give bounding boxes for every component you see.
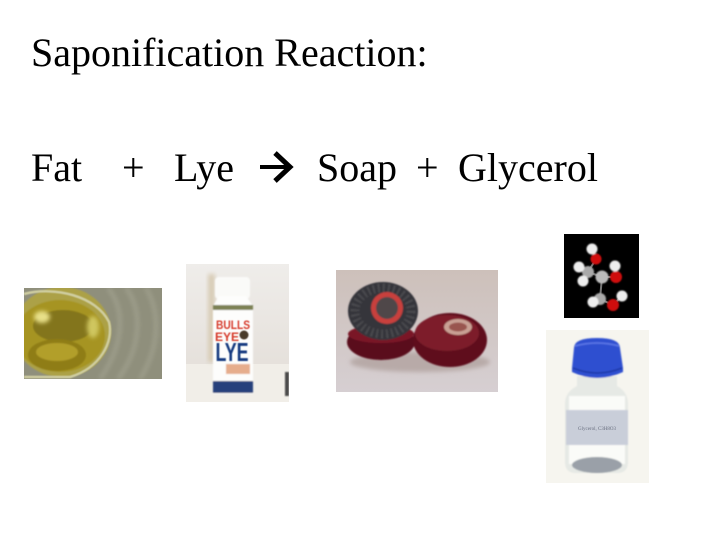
arrow [260,153,290,181]
title: Saponification Reaction: [31,30,428,75]
term: soap: Soap [317,145,397,190]
photo: soap bars [336,270,498,392]
equation [31,145,598,190]
bottle shadow [208,274,215,362]
term: fat: Fat [31,145,82,190]
bottle label text: Glycerol, C3H8O3 [578,427,617,432]
photo: lye bottle [186,264,289,402]
photo: glycerol bottle [546,330,649,483]
plus sign: + [122,145,145,190]
plus sign: + [416,145,439,190]
photo: oil in glass [13,287,162,379]
bottle label text: BULLS [216,318,250,332]
bottle label text: LYE [216,337,248,367]
term: glycerol: Glycerol [458,145,598,190]
bottle label text: EYE [215,330,239,344]
term: lye: Lye [174,145,234,190]
molecule: glycerol model [564,234,639,318]
bottle label text [214,320,250,362]
